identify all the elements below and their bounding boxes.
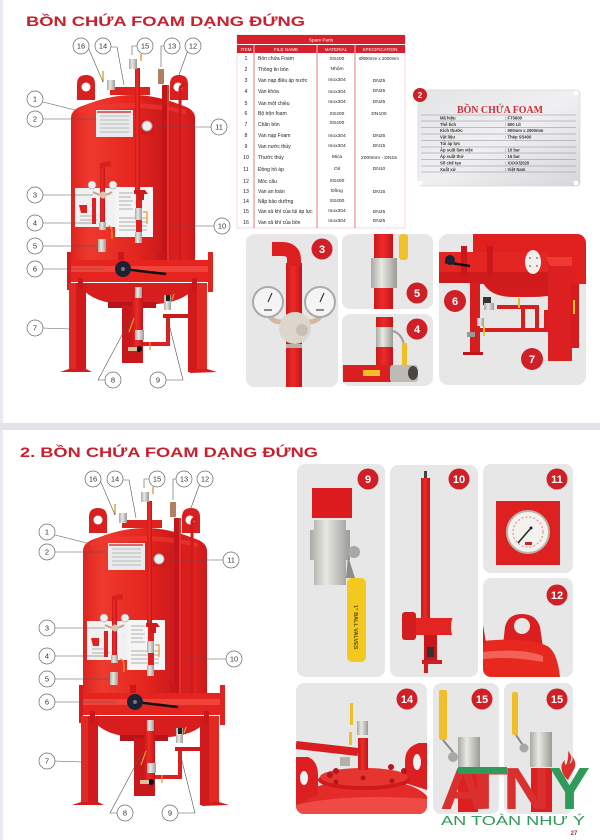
label 15: 15 [153,475,161,484]
table rows: Van xả khí của túi áp lực [258,208,313,215]
table rows: Van an toàn [258,189,285,195]
panel: part 3 [246,234,338,387]
label 11: 11 [227,556,235,565]
table rows: Móc cẩu [258,178,277,185]
table rows: Inox304 [328,77,346,83]
badge 3 [312,238,332,260]
table rows: Inox304 [328,99,346,105]
label 10: 10 [230,655,238,664]
label 12: 12 [189,42,197,51]
nameplate rows: Thể tích [440,122,456,127]
panel: part 11 [483,464,573,573]
table rows: 9 [245,144,248,150]
label 1: 1 [45,528,49,537]
label 11: 11 [215,123,223,132]
table rows: Inox304 [328,218,346,224]
table rows: SS400 [330,198,345,204]
label 3 [39,620,55,636]
panel: part 15 right [504,683,573,814]
title: top: BỒN CHỨA FOAM DẠNG ĐỨNG [26,12,305,29]
nameplate rows [440,116,544,172]
label 6 [39,694,55,710]
label 16 [73,38,89,54]
table rows: 14 [243,199,249,205]
badge 6 [444,290,466,312]
table rows: DN15 [373,143,386,149]
badge 14: 14 [401,694,414,706]
table rows: DN25 [373,209,386,215]
table rows: DN25 [373,88,386,94]
panel: part 5 [342,234,433,309]
badge 9: 9 [365,474,371,486]
table rows: DN10 [373,166,386,172]
table rows: Mica [332,154,342,160]
label 7 [39,753,55,769]
label 6: 6 [45,698,49,707]
badge 7 [521,348,543,370]
label 2: 2 [45,548,49,557]
nameplate rows: Áp suất làm việc [440,148,474,152]
badge 15: 15 [551,694,563,706]
label 1 [39,524,55,540]
label 13: 13 [180,475,188,484]
logo letters: A [440,756,486,822]
table rows: Inox304 [328,133,346,139]
table rows: Van nạp điều áp nước [258,78,308,84]
nameplate rows: Kích thước [440,128,463,133]
panel: part 14 [296,683,427,814]
label 14 [107,471,123,487]
badge 2: 2 [418,91,423,100]
label 14: 14 [99,42,107,51]
label 2 [39,544,55,560]
table rows: Đồng [331,188,343,194]
badge 4: 4 [414,324,421,336]
table rows: 7 [245,122,248,128]
label 2 [27,111,43,127]
nameplate rows: : FT0800 [505,116,523,120]
tank illustration: bottom [72,487,229,806]
label 3: 3 [45,624,49,633]
table rows: Bộ trộn foam [258,111,287,117]
nameplate rows: : 15 bar [505,154,520,159]
table rows: 15 [243,209,249,215]
label 15 [137,38,153,54]
label 13 [176,471,192,487]
logo letters: N [503,756,550,822]
badge 12: 12 [551,590,563,602]
panel: parts 6 and 7 [439,234,586,385]
logo tagline: AN TOÀN NHƯ Ý [441,813,585,828]
label 15 [149,471,165,487]
label 6: 6 [33,265,37,274]
label 8 [105,372,121,388]
label 10 [226,651,242,667]
nameplate rows: : Việt Nam [505,167,526,172]
table rows: DN25 [373,78,386,84]
table rows: SS400 [330,111,345,117]
label 8 [117,805,133,821]
label 12: 12 [201,475,209,484]
table rows: 3 [245,78,248,84]
nameplate rows: Vật liệu [440,134,455,140]
nameplate rows: Số chế tạo [440,160,462,166]
table rows: 16 [243,220,249,226]
table rows: DN25 [373,99,386,105]
label 8: 8 [111,376,115,385]
label 5: 5 [33,242,37,251]
handle marking: 1" BALL VALVES [352,605,358,650]
panel: part 12 [483,578,573,677]
label 11 [223,552,239,568]
table header: Spare Parts [309,38,334,42]
table rows: Van nước thủy [258,143,291,150]
nameplate title: BỒN CHỨA FOAM [457,103,543,116]
table rows: 6 [245,111,248,117]
table rows: SS400 [330,178,345,184]
badge 11: 11 [551,474,563,486]
label 4 [27,215,43,231]
table rows: Nhôm [330,66,344,72]
table rows: 2 [245,67,248,73]
nameplate rows: : Thép SS400 [505,134,532,140]
nameplate rows: Mã hiệu [440,116,456,120]
label 14 [95,38,111,54]
table rows: DN25 [373,133,386,139]
label 16: 16 [77,42,85,51]
label 13 [164,38,180,54]
label 9: 9 [156,376,160,385]
table rows: DN25 [373,218,386,224]
badge 3: 3 [319,244,325,256]
label 12 [185,38,201,54]
table rows [243,56,399,226]
badge 10 [448,468,470,490]
badge 9 [358,468,378,490]
nameplate rows: : XXXX/2020 [505,160,530,166]
label 12 [197,471,213,487]
label 4 [39,648,55,664]
title: bottom: 2. BỒN CHỨA FOAM DẠNG ĐỨNG [20,443,318,460]
label 5: 5 [45,675,49,684]
table rows: SS400 [330,120,345,126]
badge 15: 15 [476,694,488,706]
badge 2 [413,88,427,102]
spare parts table [237,35,405,228]
label 13: 13 [168,42,176,51]
label 6 [27,261,43,277]
table rows: Ø900mm x 2000mm [359,56,399,61]
label 15: 15 [141,42,149,51]
table header: SPECIFICATION [363,47,397,52]
table rows: SS400 [330,56,345,62]
nameplate rows: Áp suất thử [440,154,464,159]
logo letters: T [458,756,508,822]
nameplate panel [413,88,580,186]
table rows: 2000mm - DN15 [361,155,397,161]
table rows: DN100 [371,111,387,117]
badge 7: 7 [529,354,535,366]
label 5 [39,671,55,687]
label 4: 4 [45,652,49,661]
table header: FILE NAME [274,47,298,52]
panel: part 9 [297,464,385,677]
table rows: 10 [243,155,249,161]
table header [241,38,397,52]
table rows: Nắp bảo dưỡng [258,198,293,205]
label 7: 7 [45,757,49,766]
label 5 [27,238,43,254]
table rows: Van xả khí của bồn [258,219,301,226]
label 7 [27,320,43,336]
logo letters: Y [549,756,590,822]
table rows: 1 [245,56,248,62]
logo flame [561,751,575,780]
page number: 27 [571,831,578,837]
callout labels: top tank [27,38,230,388]
tank illustration: top [60,54,217,373]
label 10 [214,218,230,234]
label 16 [85,471,101,487]
label 4: 4 [33,219,37,228]
nameplate rows: : 10 bar [505,148,520,152]
badge 10: 10 [453,474,465,486]
table header: MATERIAL [325,47,348,52]
label 9 [162,805,178,821]
label 2: 2 [33,115,37,124]
table rows: Van nạp Foam [258,133,290,139]
table rows: Thước thủy [258,154,284,161]
table rows: Bồn chứa Foam [258,56,294,62]
logo: ATNY An Toàn Như Ý [440,751,590,828]
label 9 [150,372,166,388]
panel: part 10 [390,465,478,677]
table rows: 13 [243,189,249,195]
label 9: 9 [168,809,172,818]
table rows: Đồng hồ áp [258,167,284,173]
nameplate rows: : 900mm x 2000mm [505,128,544,133]
table rows: 5 [245,101,248,107]
table rows: 11 [243,167,249,173]
label 3 [27,187,43,203]
table rows: Inox304 [328,143,346,149]
label 3: 3 [33,191,37,200]
table rows: Van khóa [258,89,279,95]
badge 6: 6 [452,296,458,308]
label 10: 10 [218,222,226,231]
table rows: Thông tin bồn [258,67,289,73]
label 7: 7 [33,324,37,333]
table rows: Chân bồn [258,122,280,128]
nameplate rows: : 800 Lít [505,122,521,127]
badge 5: 5 [414,288,420,300]
table rows: 12 [243,179,249,185]
label 1: 1 [33,95,37,104]
label 11 [211,119,227,135]
label 14: 14 [111,475,119,484]
table rows: Inox304 [328,89,346,95]
table rows: Oil [334,166,340,172]
table header: ITEM [241,47,252,52]
table rows: 8 [245,133,248,139]
label 1 [27,91,43,107]
panel: part 15 left [433,683,499,814]
table rows: DN15 [373,189,386,195]
callout labels: bottom tank [39,471,242,821]
table rows: Van một chiều [258,101,290,107]
panel: part 4 [342,314,433,386]
table rows: Inox304 [328,208,346,214]
table rows: 4 [245,89,248,95]
nameplate rows: Xuất xứ [440,167,457,172]
logo letters [440,756,590,822]
label 8: 8 [123,809,127,818]
nameplate rows: Túi áp lực [440,141,461,146]
label 16: 16 [89,475,97,484]
